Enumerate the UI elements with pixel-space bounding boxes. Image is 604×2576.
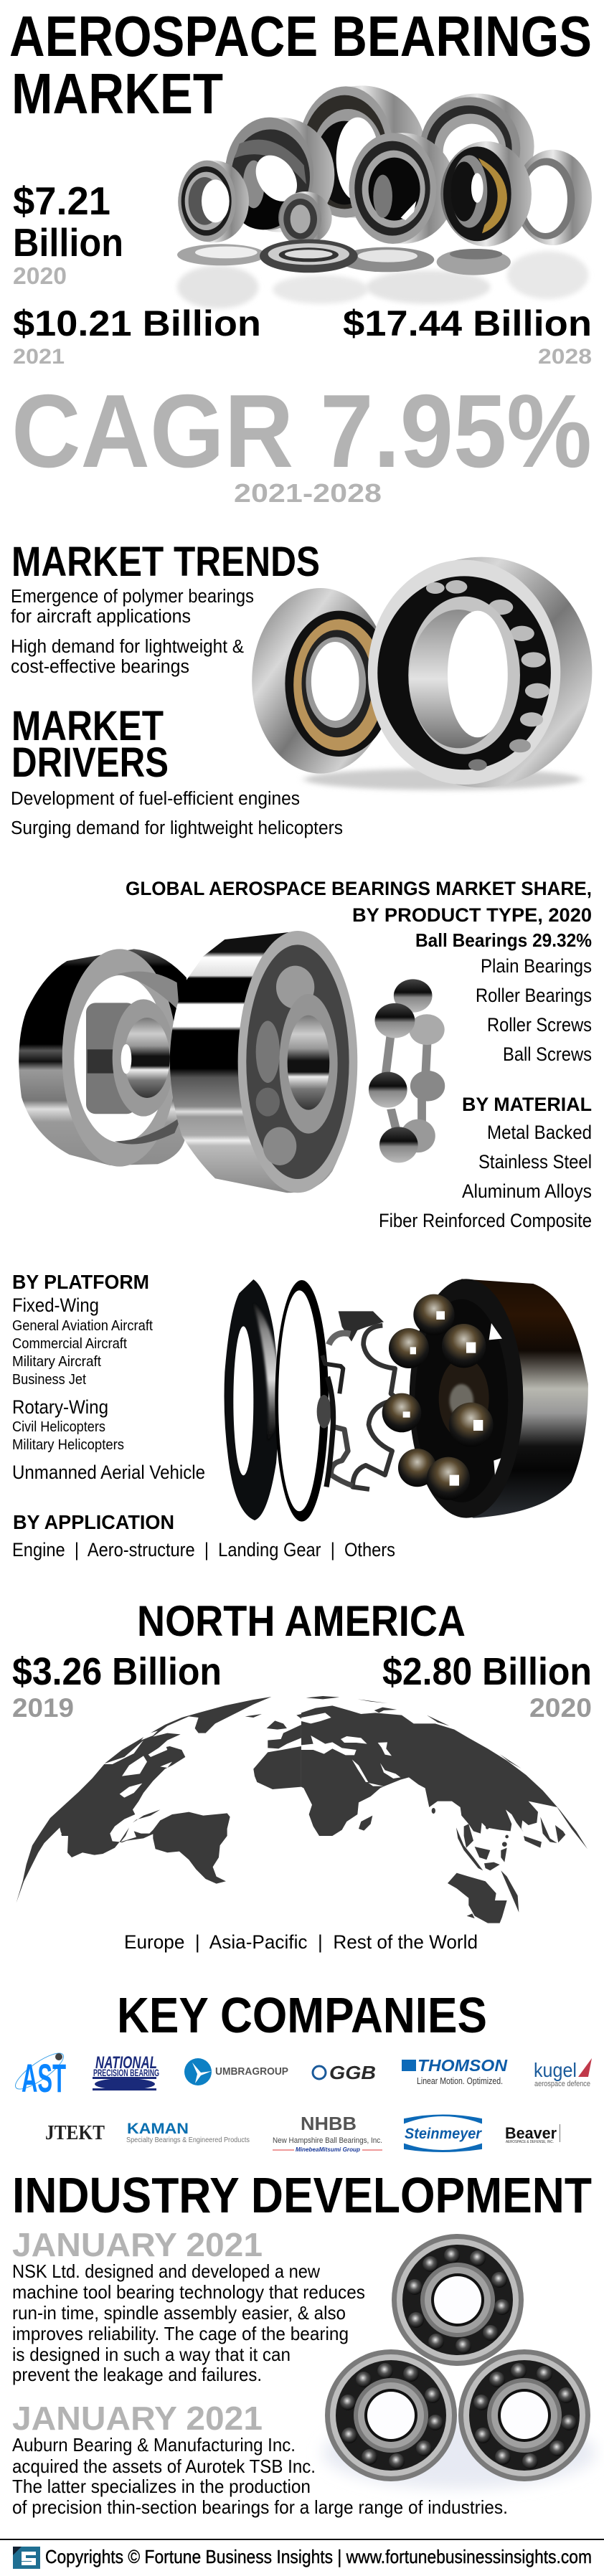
left roller bearing	[225, 118, 334, 232]
logo: GGB	[313, 2062, 376, 2083]
stat: 2019	[12, 1650, 222, 1723]
stat: 2020 market size: 2020	[13, 262, 67, 289]
stat: 2028 market size: $17.44 Billion	[343, 303, 592, 344]
text: drivers list: Development of fuel-efficient engines	[11, 789, 300, 809]
development: NSK: run-in time, spindle assembly easier, & also	[12, 2302, 346, 2324]
text: product types: Plain Bearings	[481, 955, 592, 977]
development: NSK: is designed in such a way that it can	[12, 2344, 291, 2365]
text: fixed-wing: Commercial Aircraft	[12, 1335, 127, 1352]
heading: by material: BY MATERIAL	[462, 1094, 592, 1115]
logo: Kugel: aerospace defence	[534, 2080, 590, 2088]
logo: National Precision Bearing: PRECISION BEARING	[93, 2067, 159, 2078]
second seal ring	[275, 1280, 329, 1522]
logo: NHBB: MinebeaMitsumi Group	[296, 2146, 360, 2153]
title	[9, 4, 592, 126]
logo: AST	[11, 2047, 68, 2101]
heading: market share by product type	[126, 878, 592, 926]
logo: Steinmeyer: Steinmeyer	[405, 2126, 483, 2142]
logo: Thomson: Linear Motion. Optimized.	[417, 2075, 503, 2086]
heading: north america: NORTH AMERICA	[137, 1597, 466, 1645]
logo: National Precision Bearing	[93, 2053, 159, 2090]
logo: Umbra Group: UMBRAGROUP	[215, 2065, 288, 2078]
development: NSK: prevent the leakage and failures.	[12, 2364, 262, 2385]
cage	[317, 1311, 398, 1490]
small center bearing	[278, 191, 332, 245]
text: product types: Roller Bearings	[476, 985, 592, 1006]
image: exploded metal bearing	[19, 931, 445, 1193]
logo: NHBB: New Hampshire Ball Bearings, Inc.	[273, 2136, 382, 2145]
text: product types	[476, 955, 592, 1065]
text: product types: Roller Screws	[487, 1014, 592, 1036]
flat rings	[177, 240, 511, 275]
stat: 2019: $3.26 Billion	[12, 1650, 222, 1693]
stat: 2021 market size	[13, 303, 261, 369]
text: rotary-wing: Civil Helicopters	[12, 1419, 105, 1435]
steel balls	[382, 1294, 494, 1500]
text: materials: Metal Backed	[487, 1122, 592, 1143]
development: NSK: improves reliability. The cage of the bearing	[12, 2323, 349, 2344]
text: fixed-wing: Business Jet	[12, 1371, 86, 1388]
logo: Kaman: Specialty Bearings & Engineered Products	[126, 2136, 250, 2144]
image: exploded dark bearing	[224, 1279, 588, 1522]
stat: CAGR: 2021-2028	[234, 478, 382, 508]
logo: JTEKT: JTEKT	[45, 2122, 105, 2144]
heading: market drivers: MARKET	[11, 703, 164, 749]
logo: Thomson: THOMSON	[417, 2056, 507, 2075]
text: unmanned aerial vehicle: Unmanned Aerial Vehicle	[12, 1462, 205, 1483]
logo: Beaver: AEROSPACE & DEFENSE, INC.	[506, 2140, 554, 2144]
logo: Beaver: Beaver	[505, 2124, 557, 2142]
text: rotary-wing: Military Helicopters	[12, 1436, 124, 1453]
text: trends list: for aircraft applications	[11, 607, 191, 627]
text: rotary-wing	[12, 1396, 124, 1453]
development: Auburn	[12, 2400, 508, 2518]
back right bearing	[420, 93, 534, 200]
text: product types: Ball Screws	[503, 1043, 592, 1065]
highlight: ball bearings share: Ball Bearings 29.32%	[415, 929, 592, 951]
title: MARKET	[11, 62, 223, 126]
far right bearing	[514, 150, 592, 245]
development: Auburn: acquired the assets of Aurotek TSB Inc.	[12, 2456, 316, 2477]
stat: 2019: 2019	[12, 1693, 74, 1723]
text: materials	[379, 1122, 592, 1231]
gold cage bearing	[440, 141, 532, 247]
text: trends list	[11, 587, 254, 677]
text: fixed-wing: Fixed-Wing	[12, 1294, 99, 1316]
logo: Kugel: kugel	[534, 2059, 577, 2081]
text: fixed-wing: Military Aircraft	[12, 1353, 101, 1370]
text: trends list: cost-effective bearings	[11, 657, 189, 677]
logo: GGB: GGB	[329, 2062, 376, 2083]
heading: by application: BY APPLICATION	[13, 1511, 174, 1533]
logo: Kaman	[126, 2121, 250, 2144]
image: three bearings	[323, 2234, 595, 2489]
stat: 2021 market size: $10.21 Billion	[13, 303, 261, 344]
logo: National Precision Bearing: NATIONAL	[95, 2053, 157, 2073]
stat: 2028 market size	[343, 303, 592, 369]
stat: 2020: 2020	[529, 1693, 592, 1723]
world map	[16, 1696, 588, 1923]
text: materials: Aluminum Alloys	[462, 1180, 592, 1202]
development: Auburn: Auburn Bearing & Manufacturing Inc.	[12, 2434, 296, 2456]
outer race	[410, 1279, 588, 1518]
stat: 2028 market size: 2028	[538, 345, 592, 369]
logo: Kaman: KAMAN	[127, 2121, 189, 2137]
logo: Kugel	[534, 2058, 592, 2088]
development: Auburn: of precision thin-section bearings for a large range of industries.	[12, 2496, 508, 2518]
heading: market drivers	[11, 703, 169, 786]
logo: NHBB	[273, 2113, 382, 2153]
outer seal ring	[224, 1279, 281, 1520]
text: fixed-wing	[12, 1294, 153, 1388]
development: NSK: JANUARY 2021	[12, 2226, 263, 2263]
development: Auburn: JANUARY 2021	[12, 2400, 263, 2437]
logo: NHBB: NHBB	[301, 2113, 357, 2134]
development: NSK: machine tool bearing technology that reduces	[12, 2281, 365, 2303]
image: two bearings	[252, 557, 592, 790]
logo: AST: AST	[22, 2055, 66, 2101]
heading: key companies: KEY COMPANIES	[117, 1987, 487, 2043]
image: bearing collection	[177, 85, 592, 308]
left small bearing	[178, 161, 249, 242]
heading: market trends: MARKET TRENDS	[11, 539, 320, 585]
stat: 2020: $2.80 Billion	[382, 1650, 592, 1693]
logo: Thomson	[402, 2056, 507, 2086]
text: trends list: High demand for lightweight &	[11, 637, 244, 657]
logo: Umbra Group	[184, 2058, 288, 2085]
heading: by platform: BY PLATFORM	[12, 1271, 149, 1293]
text: fixed-wing: General Aviation Aircraft	[12, 1317, 153, 1334]
development: Auburn: The latter specializes in the production	[12, 2476, 311, 2497]
stat: 2021 market size: 2021	[13, 345, 65, 369]
stat: 2020 market size	[13, 179, 123, 289]
text: trends list: Emergence of polymer bearings	[11, 587, 254, 607]
stat: 2020 market size: Billion	[13, 220, 123, 265]
heading: market share by product type: GLOBAL AEROSPACE BEARINGS MARKET SHARE,	[126, 878, 592, 899]
development: NSK	[12, 2226, 365, 2385]
text: applications: Engine | Aero-structure | Landing Gear | Others	[12, 1539, 395, 1561]
heading: market drivers: DRIVERS	[11, 739, 169, 786]
back top bearing	[298, 85, 426, 219]
text: rotary-wing: Rotary-Wing	[12, 1396, 108, 1418]
development: NSK: NSK Ltd. designed and developed a new	[12, 2260, 320, 2282]
heading: market share by product type: BY PRODUCT TYPE, 2020	[352, 904, 592, 926]
text: other regions: Europe | Asia-Pacific | Rest of the World	[124, 1931, 478, 1953]
text: materials: Stainless Steel	[478, 1151, 592, 1173]
front center bearing	[349, 133, 456, 244]
icon: Fortune Business Insights logo	[13, 2547, 40, 2569]
text: drivers list	[11, 789, 343, 838]
logo: Steinmeyer	[405, 2116, 483, 2151]
stat: 2020	[382, 1650, 592, 1723]
text: drivers list: Surging demand for lightweight helicopters	[11, 818, 343, 838]
stat: 2020 market size: $7.21	[13, 179, 110, 223]
